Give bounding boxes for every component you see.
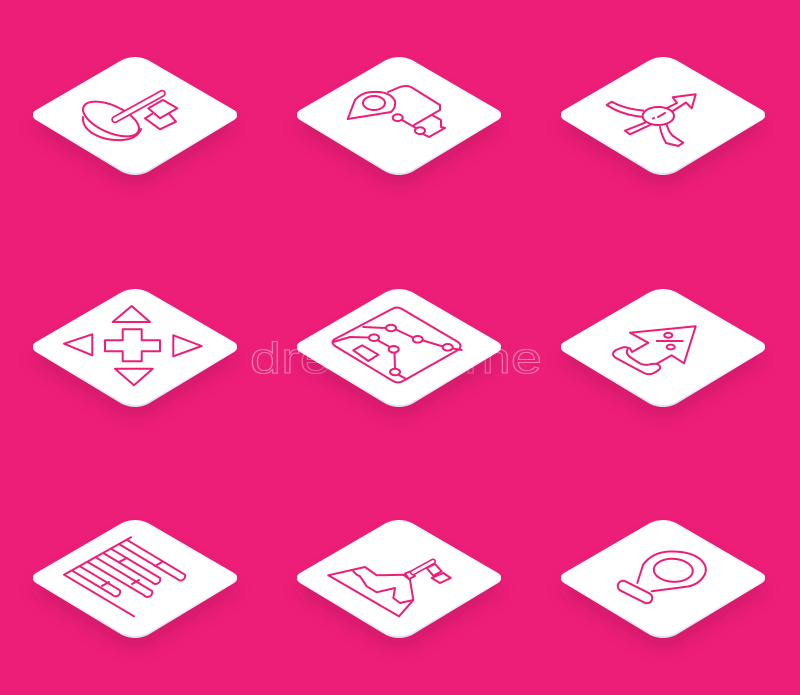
tile: direction pad	[33, 289, 237, 418]
tile: truck route	[297, 57, 501, 186]
icon: pin with flag	[78, 94, 177, 144]
tile: comb chart	[33, 520, 237, 649]
icon: arrow with percent	[613, 326, 696, 374]
icon: road junction with arrow	[607, 94, 696, 146]
tile: mountain flag	[297, 520, 501, 649]
icon: striped bars	[64, 537, 185, 616]
icon: map pin on base	[623, 551, 706, 598]
tile: route map	[297, 289, 501, 418]
watermark: dreamstime	[250, 334, 542, 383]
tile: discount arrow	[561, 289, 765, 418]
tile: key with flag	[33, 57, 237, 186]
tile: location pin	[561, 520, 765, 649]
icon: truck with map pin	[348, 86, 445, 137]
icon: map with route points	[332, 308, 462, 382]
icon: arrows and cross	[64, 306, 202, 385]
tile: road junction	[561, 57, 765, 186]
icon: mountain with flag	[328, 562, 451, 616]
